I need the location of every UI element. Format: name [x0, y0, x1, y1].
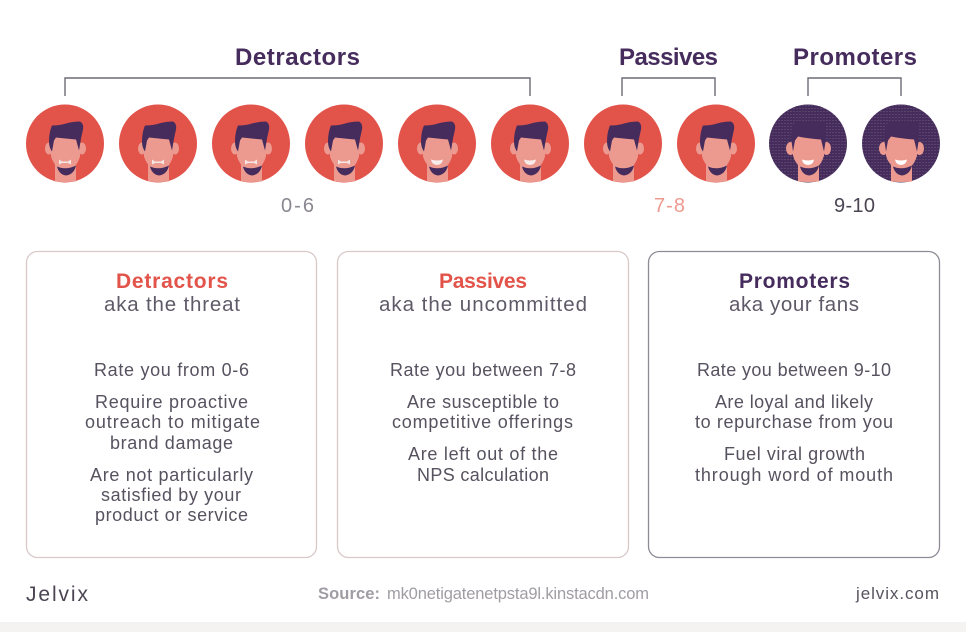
text block: detractor traits: brand damage: [110, 433, 233, 453]
panel: passives: [338, 252, 628, 558]
text block: promoter traits: through word of mouth: [695, 465, 893, 485]
face icon: detractor 5: [398, 104, 476, 182]
source line: Source:: [318, 585, 380, 603]
text block: detractor traits: Rate you from 0-6: [94, 360, 249, 380]
score: 7-8: 7-8: [654, 195, 685, 217]
text block: detractor traits: satisfied by your: [101, 485, 241, 505]
website: jelvix.com: jelvix.com: [855, 584, 939, 603]
face icon: detractor 4: [305, 104, 383, 182]
score: 0-6: 0-6: [281, 195, 314, 217]
panel subtitle: aka the uncommitted: aka the uncommitted: [379, 293, 587, 316]
bracket: Promoters: [808, 78, 901, 96]
text block: detractor traits: [85, 360, 260, 525]
text block: passive traits: NPS calculation: [417, 465, 549, 485]
text block: detractor traits: product or service: [95, 505, 248, 525]
text block: detractor traits: outreach to mitigate: [85, 412, 260, 432]
heading: Detractors: Detractors: [235, 44, 360, 71]
text block: passive traits: Rate you between 7-8: [390, 360, 576, 380]
logo: Jelvix: Jelvix: [26, 583, 88, 606]
face icon: passive 1: [584, 104, 662, 182]
source line: mk0netigatenetpsta9l.kinstacdn.com: [387, 585, 649, 603]
face icon: promoter 1: [769, 104, 847, 182]
text block: promoter traits: Rate you between 9-10: [697, 360, 891, 380]
text block: promoter traits: to repurchase from you: [695, 412, 893, 432]
text block: detractor traits: Require proactive: [95, 392, 248, 412]
heading: Passives: Passives: [619, 44, 718, 71]
face icon: detractor 3: [212, 104, 290, 182]
panel subtitle: aka the threat: aka the threat: [104, 293, 240, 316]
panel subtitle: aka your fans: aka your fans: [729, 293, 859, 316]
text block: promoter traits: Fuel viral growth: [724, 444, 865, 464]
text block: passive traits: competitive offerings: [392, 412, 573, 432]
panel: promoters: [648, 252, 940, 558]
heading: Promoters: Promoters: [793, 44, 917, 71]
text block: passive traits: [390, 360, 576, 485]
panel title: Promoters: Promoters: [739, 270, 850, 293]
text block: promoter traits: [695, 360, 893, 485]
face icon: promoter 2: [862, 104, 940, 182]
face icon: passive 2: [677, 104, 755, 182]
page border shade: [0, 622, 966, 632]
face icon: detractor 6: [491, 104, 569, 182]
face icon: detractor 1: [26, 104, 104, 182]
panel title: Detractors: Detractors: [116, 270, 228, 293]
text block: promoter traits: Are loyal and likely: [715, 392, 873, 412]
text block: passive traits: Are susceptible to: [407, 392, 559, 412]
bracket: Detractors: [65, 78, 530, 96]
face icon: detractor 2: [119, 104, 197, 182]
panel title: Passives: Passives: [439, 270, 527, 293]
bracket: Passives: [622, 78, 715, 96]
text block: detractor traits: Are not particularly: [90, 465, 253, 485]
score: 9-10: 9-10: [834, 195, 875, 217]
text block: passive traits: Are left out of the: [408, 444, 558, 464]
panel: detractors: [26, 252, 316, 558]
